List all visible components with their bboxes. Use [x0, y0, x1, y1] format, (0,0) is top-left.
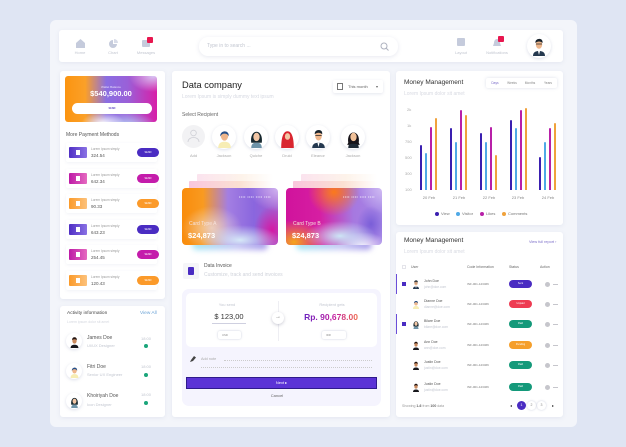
- transfer form: [182, 289, 381, 406]
- payment row 4: SEND: [145, 228, 151, 231]
- table row: Ann Doe: [413, 340, 558, 350]
- arrow button: →: [275, 314, 281, 320]
- pagination: 3: [541, 403, 542, 407]
- table row: Ann Doe: ann@doe.com: [424, 346, 446, 350]
- table row: Ann Doe: Pending: [516, 343, 525, 346]
- table row: Ann Doe: Ann Doe: [424, 340, 438, 344]
- nav item: chart: [108, 39, 118, 55]
- card label A: Card Type A: [189, 221, 216, 227]
- table header: Code Information: [467, 265, 494, 269]
- payment row 6: SEND: [145, 279, 151, 282]
- table row: Bilare Doe: bilare@doe.com: [424, 325, 448, 329]
- recipient: Eleanor: [305, 130, 331, 158]
- chart legend: View: [441, 211, 450, 216]
- table row: Bilare Doe: Bilare Doe: [424, 319, 440, 323]
- y axis labels: 1k: [407, 123, 411, 128]
- balance card: SEND: [109, 107, 115, 110]
- table row: Justin Doe: INF-001-123466: [467, 385, 489, 389]
- recipient gets label: Recipient gets: [319, 302, 345, 307]
- table row: Justin Doe: INF-001-123466: [467, 363, 489, 367]
- nav item: home: [75, 39, 86, 55]
- pagination: ◂: [510, 403, 512, 408]
- table header: User: [411, 265, 418, 269]
- payment row 5: [66, 245, 157, 264]
- panel: activity information: [60, 306, 165, 417]
- table row: Bilare Doe: [396, 314, 558, 334]
- nav item: notifications: Notifications: [486, 50, 508, 55]
- card label B: Card Type B: [293, 221, 321, 227]
- chart subtitle: Lorem Ipsum dolor sit amet: [404, 91, 465, 97]
- activity row: Khoiriyah Doe: [65, 392, 151, 411]
- y axis labels: 100: [405, 187, 412, 192]
- activity row: Khoiriyah Doe: Icon Designer: [87, 402, 112, 407]
- table row: Ann Doe: INF-001-123466: [467, 343, 489, 347]
- search box: Type in to search ...: [207, 43, 251, 49]
- currency select IDR: [322, 331, 346, 339]
- payment row 2: 642.34: [91, 179, 105, 184]
- x axis labels: 21 Feb: [453, 195, 465, 200]
- range tabs: Days: [491, 81, 499, 85]
- y axis labels: 2k: [407, 107, 411, 112]
- table row: John Doe: john@doe.com: [424, 285, 446, 289]
- heading: more payment methods: More Payment Methods: [66, 132, 119, 138]
- payment row 1: Lorem Ipsum simply: [91, 147, 120, 151]
- balance card: Wallet Balance: [101, 85, 121, 89]
- pagination: ▸: [552, 403, 554, 408]
- activity row: Fitri Doe: Senior UX Engineer: [87, 372, 122, 377]
- card type B: [286, 188, 382, 245]
- table row: Dianne Doe: Unpaid: [517, 302, 524, 305]
- nav item: home: Home: [75, 50, 85, 55]
- table row: Justin Doe: justin@doe.com: [424, 388, 448, 392]
- payment row 3: [66, 194, 157, 213]
- table footer text: Showing 1-6 from 100 data: [402, 404, 444, 408]
- invoice title: Data Invoice: [204, 263, 232, 269]
- activity row: Khoiriyah Doe: Khoiriyah Doe: [87, 393, 118, 399]
- you send label: You send: [219, 302, 235, 307]
- month dropdown: This month: [348, 84, 368, 88]
- invoice subtitle: Customize, track and send invoices: [204, 272, 283, 278]
- subtitle: Lorem Ipsum is simply dummy text ipsum: [182, 94, 274, 100]
- activity row: Khoiriyah Doe: 18:00: [141, 392, 151, 397]
- activity row: James Doe: James Doe: [87, 335, 112, 341]
- activity subtitle: Lorem ipsum dolor sit amet: [67, 320, 109, 324]
- payment row 5: SEND: [145, 253, 151, 256]
- table row: John Doe: INF-001-123466: [467, 282, 489, 286]
- payment row 4: [66, 220, 157, 239]
- bars 23 Feb: [510, 108, 527, 190]
- dashboard frame: [50, 20, 577, 427]
- next button: [186, 377, 377, 389]
- heading: select recipient: Select Recipient: [182, 112, 218, 118]
- card stack backing A: [189, 174, 267, 188]
- cancel link: Cancel: [271, 393, 283, 398]
- bars 24 Feb: [539, 123, 556, 190]
- x axis labels: 20 Feb: [423, 195, 435, 200]
- currency select USD: [218, 331, 241, 339]
- recipient: Druid: Druid: [282, 153, 292, 158]
- nav item: notifications: [486, 36, 508, 55]
- payment row 1: 324.54: [91, 153, 105, 158]
- bars 21 Feb: [450, 110, 467, 190]
- payment row 2: SEND: [145, 177, 151, 180]
- nav item: messages: [137, 37, 155, 55]
- table header: Action: [540, 265, 550, 269]
- balance card: [65, 76, 157, 122]
- card type A: [182, 188, 278, 245]
- table row: Justin Doe: Justin Doe: [424, 360, 441, 364]
- table row: Justin Doe: Paid: [518, 385, 523, 388]
- activity row: Fitri Doe: [65, 364, 151, 381]
- table row: John Doe: Sent: [518, 282, 523, 285]
- view full report link: View full report ›: [529, 240, 556, 244]
- card amount A: $24,873: [188, 231, 215, 240]
- pagination: 1: [521, 403, 522, 407]
- x axis labels: 22 Feb: [483, 195, 495, 200]
- table row: Justin Doe: justin@doe.com: [424, 366, 448, 370]
- table row: John Doe: John Doe: [424, 279, 439, 283]
- view all link: View All: [140, 311, 157, 316]
- payment row 1: SEND: [145, 151, 151, 154]
- month dropdown: [333, 80, 383, 93]
- next button: Next ▸: [276, 380, 287, 385]
- table row: Dianne Doe: [413, 299, 558, 309]
- table header: Status: [509, 265, 519, 269]
- chart legend: Comments: [508, 211, 527, 216]
- card dots B: •••• •••• •••• ••••: [343, 195, 375, 199]
- recipient: Jackson: [340, 130, 366, 158]
- recipient amount: Rp. 90,678.00: [304, 312, 358, 322]
- search box: [199, 37, 398, 56]
- table header: [402, 265, 550, 269]
- title: Data company: [182, 80, 242, 90]
- recipient: Jackson: [211, 130, 237, 158]
- y axis labels: [405, 107, 412, 192]
- range tabs: Years: [544, 81, 552, 85]
- payment row 6: 120.43: [91, 281, 105, 286]
- recipient: Quiche: [243, 130, 269, 158]
- nav item: messages: Messages: [137, 50, 155, 55]
- panel: payment methods: [60, 71, 165, 299]
- payment row 1: [66, 143, 157, 162]
- payment row 2: Lorem Ipsum simply: [91, 173, 120, 177]
- activity row: James Doe: UI/UX Designer: [87, 343, 115, 348]
- table row: Justin Doe: [413, 382, 558, 392]
- profile avatar: [527, 34, 551, 58]
- x axis labels: 23 Feb: [512, 195, 524, 200]
- payment row 5: Lorem Ipsum simply: [91, 249, 120, 253]
- recipient: Eleanor: Eleanor: [311, 153, 325, 158]
- table row: Dianne Doe: dianne@doe.com: [424, 305, 450, 309]
- range tabs: [486, 78, 557, 88]
- recipient: Jackson: Jackson: [346, 153, 360, 158]
- recipient: add: [182, 125, 205, 158]
- payment row 6: Lorem Ipsum simply: [91, 275, 120, 279]
- add note: Add note: [201, 357, 216, 361]
- arrow button: [272, 312, 284, 324]
- range tabs: Months: [525, 81, 535, 85]
- card stack backing B: [293, 174, 371, 188]
- card glow A: [192, 240, 268, 250]
- recipient: add: Add: [190, 153, 197, 158]
- activity heading: Activity information: [67, 311, 107, 316]
- activity row: James Doe: 18:00: [141, 336, 151, 341]
- payment row 4: 643.23: [91, 230, 105, 235]
- payment row 3: 90.33: [91, 204, 102, 209]
- card amount B: $24,873: [292, 231, 319, 240]
- currency select USD: USD: [222, 333, 228, 337]
- panel: data company: [172, 71, 390, 417]
- pagination: 2: [531, 403, 532, 407]
- panel: money management chart: [396, 71, 563, 225]
- add note: [190, 356, 372, 368]
- y axis labels: 500: [405, 155, 412, 160]
- y axis labels: 300: [405, 171, 412, 176]
- payment row 2: [66, 169, 157, 188]
- recipient: Jackson: Jackson: [217, 153, 231, 158]
- currency select IDR: IDR: [326, 333, 331, 337]
- payment row 3: SEND: [145, 202, 151, 205]
- table row: Bilare Doe: INF-001-123466: [467, 322, 489, 326]
- card glow B: [296, 240, 372, 250]
- bars 22 Feb: [480, 127, 497, 190]
- panel: money management table: [396, 232, 563, 417]
- table subtitle: Lorem Ipsum dolor sit amet: [404, 249, 465, 255]
- card dots A: •••• •••• •••• ••••: [239, 195, 271, 199]
- balance card: $540,900.00: [90, 89, 132, 98]
- table row: Justin Doe: Paid: [518, 363, 523, 366]
- table row: John Doe: [396, 274, 558, 294]
- table row: Dianne Doe: INF-001-123466: [467, 302, 489, 306]
- payment row 3: Lorem Ipsum simply: [91, 198, 120, 202]
- invoice icon: [183, 263, 199, 279]
- nav item: chart: Chart: [108, 50, 118, 55]
- you send amount: $ 123,00: [214, 312, 244, 321]
- payment row 4: Lorem Ipsum simply: [91, 224, 120, 228]
- chart legend: [435, 211, 528, 216]
- nav item: layout: Layout: [455, 50, 467, 55]
- pagination: [510, 400, 554, 411]
- top navigation bar: [59, 30, 563, 62]
- payment row 5: 254.45: [91, 255, 105, 260]
- activity row: Fitri Doe: 18:00: [141, 364, 151, 369]
- activity row: James Doe: [65, 335, 151, 351]
- payment row 6: [66, 271, 157, 290]
- activity row: Fitri Doe: Fitri Doe: [87, 364, 106, 370]
- nav item: layout: [455, 38, 467, 55]
- table row: Bilare Doe: Paid: [518, 322, 523, 325]
- chart title: Money Management: [404, 79, 463, 86]
- recipient: Quiche: Quiche: [250, 153, 262, 158]
- chart legend: Likes: [486, 211, 495, 216]
- chart legend: Visitor: [462, 211, 473, 216]
- x axis labels: [423, 195, 554, 200]
- table row: Justin Doe: Justin Doe: [424, 382, 441, 386]
- table row: Justin Doe: [413, 360, 558, 370]
- y axis labels: 750: [405, 139, 412, 144]
- range tabs: Weeks: [507, 81, 517, 85]
- x axis labels: 24 Feb: [542, 195, 554, 200]
- bars 20 Feb: [420, 118, 437, 190]
- table title: Money Management: [404, 237, 463, 244]
- converter card: [186, 293, 377, 347]
- table row: Dianne Doe: Dianne Doe: [424, 299, 442, 303]
- recipient: Druid: [274, 130, 300, 158]
